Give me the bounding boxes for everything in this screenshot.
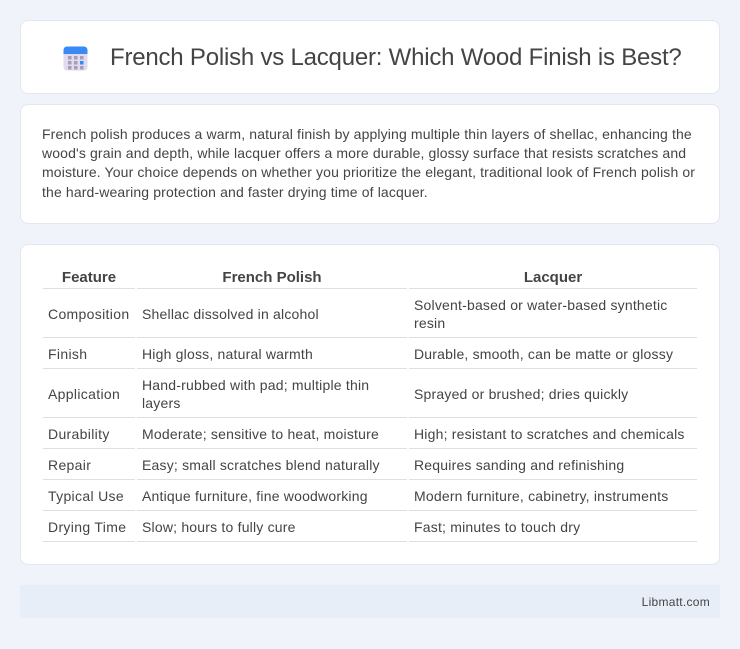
row: application: Hand-rubbed with pad; multiple thin xyxy=(142,377,369,393)
row: composition: Solvent-based or water-based synthetic xyxy=(414,297,668,313)
row: application: layers xyxy=(142,395,181,411)
title: French Polish vs Lacquer: Which Wood Finish is Best? xyxy=(110,44,682,71)
row: durability: Durability xyxy=(48,426,110,442)
row: finish xyxy=(48,346,673,362)
row: composition: resin xyxy=(414,315,445,331)
row: typical use: Typical Use xyxy=(48,488,124,504)
panel: intro text xyxy=(20,104,720,224)
row: drying time xyxy=(48,519,580,535)
footer bar xyxy=(20,585,720,618)
intro paragraph: wood's grain and depth, while lacquer offers a more durable, glossy surface that resists scratches and xyxy=(42,145,686,161)
row: typical use: Antique furniture, fine woodworking xyxy=(142,488,368,504)
footer credit: Libmatt.com xyxy=(642,595,710,609)
row: typical use: Modern furniture, cabinetry, instruments xyxy=(414,488,668,504)
row: drying time: Fast; minutes to touch dry xyxy=(414,519,580,535)
panel: comparison table xyxy=(20,244,720,565)
row: finish: High gloss, natural warmth xyxy=(142,346,313,362)
row: durability: High; resistant to scratches and chemicals xyxy=(414,426,685,442)
panel: title header xyxy=(20,20,720,94)
row: composition: Shellac dissolved in alcohol xyxy=(142,306,319,322)
row: repair: Requires sanding and refinishing xyxy=(414,457,624,473)
header row: Lacquer xyxy=(524,269,582,286)
header row: French Polish xyxy=(222,269,322,286)
row: typical use xyxy=(48,488,668,504)
header row xyxy=(43,269,697,289)
row: drying time: Drying Time xyxy=(48,519,126,535)
row: durability xyxy=(48,426,685,442)
intro paragraph: French polish produces a warm, natural finish by applying multiple thin layers of shellac, enhancing the xyxy=(42,126,692,142)
header row: Feature xyxy=(62,269,116,286)
row: application: Application xyxy=(48,386,120,402)
row: application xyxy=(48,377,628,411)
row: drying time: Slow; hours to fully cure xyxy=(142,519,296,535)
intro paragraph: the hard-wearing protection and faster drying time of lacquer. xyxy=(42,184,428,200)
row: composition: Composition xyxy=(48,306,129,322)
row: repair xyxy=(48,457,624,473)
row: composition xyxy=(48,297,668,331)
row: application: Sprayed or brushed; dries quickly xyxy=(414,386,628,402)
icon: calendar xyxy=(64,46,88,70)
row: finish: Durable, smooth, can be matte or glossy xyxy=(414,346,673,362)
row: repair: Easy; small scratches blend naturally xyxy=(142,457,380,473)
row: durability: Moderate; sensitive to heat, moisture xyxy=(142,426,379,442)
intro paragraph: moisture. Your choice depends on whether you prioritize the elegant, traditional look of French polish or xyxy=(42,164,695,180)
intro paragraph xyxy=(42,126,695,200)
row: finish: Finish xyxy=(48,346,87,362)
row: repair: Repair xyxy=(48,457,91,473)
